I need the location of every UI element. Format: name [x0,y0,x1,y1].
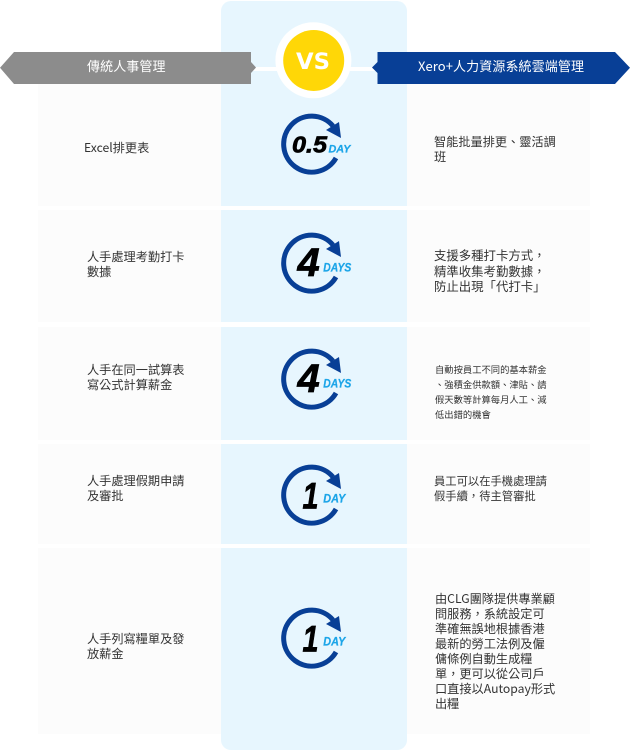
text: row 2 right: 支援多種打卡方式， [434,246,546,264]
text: row 2 left: 人手處理考勤打卡 [87,247,184,265]
text: row 3 left: 人手在同一試算表 [87,360,184,378]
text: row 5 right [435,589,555,712]
icon: VS badge: VS [296,50,330,75]
icon: 0.5 day: 0.5 [292,132,328,158]
icon: 1 day: DAY [323,634,346,648]
text: row 4 left: 及審批 [87,486,124,504]
text: row 3 left: 寫公式計算薪金 [87,375,172,393]
icon: 4 days [281,232,352,294]
text: row 5 right: 出糧 [435,694,459,712]
text: row 1 left: Excel排更表 [84,138,149,156]
icon: 1 day [281,608,346,669]
icon: 4 days: 4 [296,241,320,285]
icon: 4 days [281,348,352,410]
text: row 1 right [434,132,556,165]
text: row 3 right: 自動按員工不同的基本薪金 [435,362,547,376]
text: row 5 right: 單，更可以從公司戶 [435,664,545,682]
icon: 0.5 day [281,114,352,175]
text: row 2 left [87,247,184,280]
text: row 2 right: 精準收集考勤數據， [434,262,546,280]
text: row 3 right: 、強積金供款額、津貼、請 [435,377,547,391]
text: row 2 right [434,246,546,295]
header: comparison banner [0,22,630,98]
icon: 4 days: DAYS [323,260,351,274]
icon: VS badge [275,22,351,98]
icon: 4 days: DAYS [323,376,351,390]
heading: Xero HR: Xero+人力資源系統雲端管理 [418,56,584,75]
text: row 3 left [87,360,184,393]
text: row 5 right: 問服務，系統設定可 [435,604,545,622]
heading: traditional HR: 傳統人事管理 [87,56,166,75]
icon: 0.5 day: DAY [328,144,352,156]
text: row 5 right: 準確無誤地根據香港 [435,619,545,637]
text: row 1 right: 班 [434,147,446,165]
connector line [250,67,380,71]
banner: Xero [372,52,630,84]
banner: traditional [0,52,256,84]
icon: 1 day: 1 [302,476,318,516]
icon: 1 day: 1 [302,618,318,660]
icon: 1 day: DAY [323,492,346,506]
text: row 3 right: 低出錯的機會 [435,407,491,421]
text: row 3 right: 假天數等計算每月人工、減 [435,392,547,406]
text: row 4 right [434,473,547,504]
text: row 2 right: 防止出現「代打卡」 [434,277,546,295]
text: row 1 right: 智能批量排更、靈活調 [434,132,556,150]
panel: centre time column [221,1,407,750]
text: row 5 left: 放薪金 [87,644,124,662]
text: row 5 right: 口直接以Autopay形式 [435,679,555,697]
text: row 4 right: 假手續，待主管審批 [434,488,536,504]
text: row 5 right: 傭條例自動生成糧 [435,649,532,667]
text: row 5 left [87,629,184,662]
icon: 4 days: 4 [296,357,320,401]
text: row 5 left: 人手列寫糧單及發 [87,629,184,647]
text: row 3 right [435,362,547,421]
text: row 4 left [87,471,184,504]
text: row 4 left: 人手處理假期申請 [87,471,184,489]
text: row 2 left: 數據 [87,262,111,280]
text: row 4 right: 員工可以在手機處理請 [434,473,547,489]
text: row 5 right: 最新的勞工法例及僱 [435,634,545,652]
icon: 1 day [281,464,346,526]
text: row 5 right: 由CLG團隊提供專業顧 [435,589,555,607]
